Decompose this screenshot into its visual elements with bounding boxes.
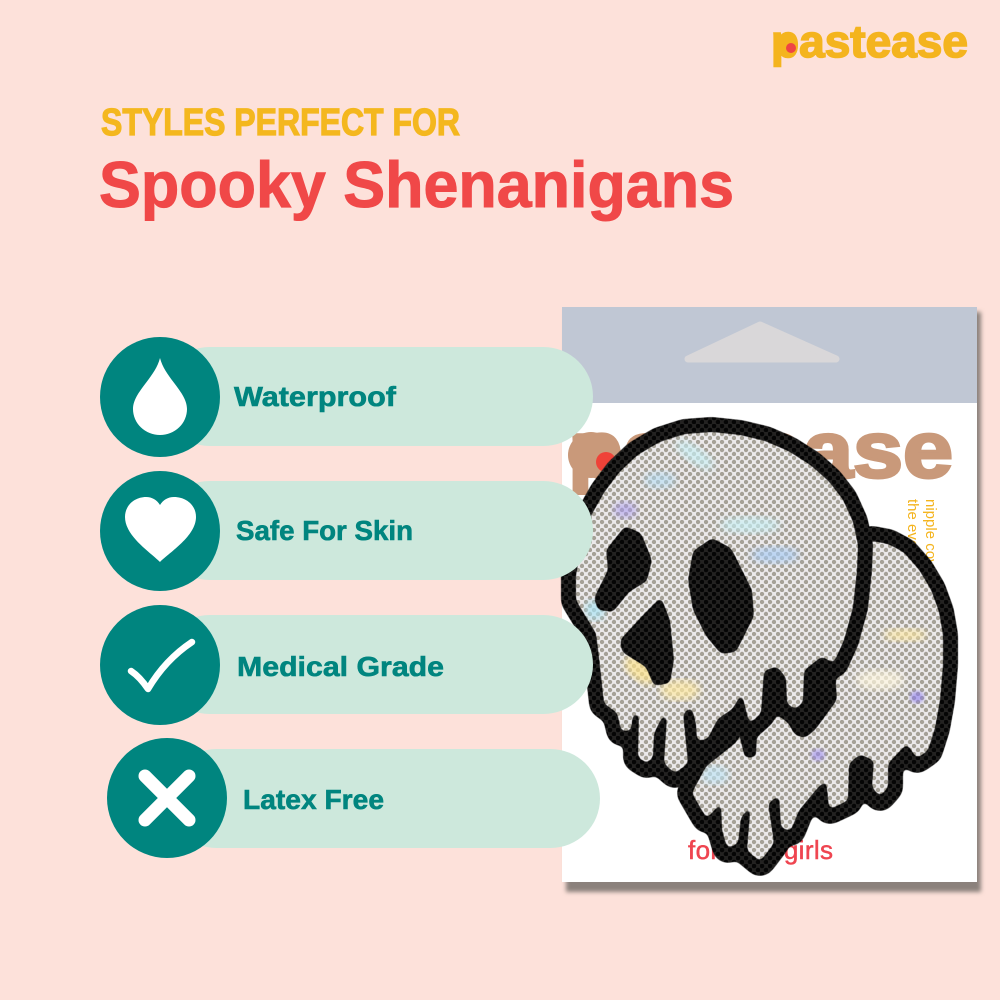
package logo bowl — [568, 432, 614, 478]
card body — [562, 307, 977, 882]
feature: Latex Free — [107, 738, 600, 858]
label: Safe For Skin — [236, 515, 413, 546]
pill — [160, 347, 593, 446]
icon: heart — [125, 497, 196, 562]
pill — [160, 481, 593, 580]
label: Medical Grade — [237, 651, 444, 682]
icon: check mark — [131, 642, 192, 689]
icon circle — [100, 337, 220, 457]
vertical tagline: nipple covers for — [922, 499, 939, 609]
pill — [160, 615, 593, 714]
icon: cross — [145, 776, 189, 820]
feature: Waterproof — [100, 337, 593, 457]
vertical tagline: the everyday — [904, 499, 921, 585]
card header band — [562, 307, 977, 403]
skull eyes and nose — [594, 527, 754, 686]
package footer text: for cool girls — [688, 835, 833, 865]
package brand name: pastease — [568, 405, 953, 494]
maple leaf mark — [596, 452, 616, 472]
icon circle — [107, 738, 227, 858]
pill — [167, 749, 600, 848]
label: Latex Free — [243, 784, 384, 815]
holographic glints front — [585, 436, 799, 700]
icon: water drop — [133, 358, 187, 435]
vertical tagline — [904, 499, 939, 609]
card shadow — [566, 312, 981, 892]
label: Waterproof — [234, 381, 397, 412]
skull: back — [677, 526, 958, 876]
heading: styles perfect for: STYLES PERFECT FOR — [101, 102, 460, 144]
product package card — [562, 307, 981, 892]
feature: Medical Grade — [100, 605, 593, 725]
title: Spooky Shenanigans: Spooky Shenanigans — [99, 148, 734, 221]
skull: front — [560, 416, 874, 788]
icon circle — [100, 471, 220, 591]
hang hole — [688, 325, 836, 359]
holographic glints back — [701, 629, 927, 784]
icon circle — [100, 605, 220, 725]
logo: pastease: pastease — [771, 16, 968, 67]
feature: Safe For Skin — [100, 471, 593, 591]
